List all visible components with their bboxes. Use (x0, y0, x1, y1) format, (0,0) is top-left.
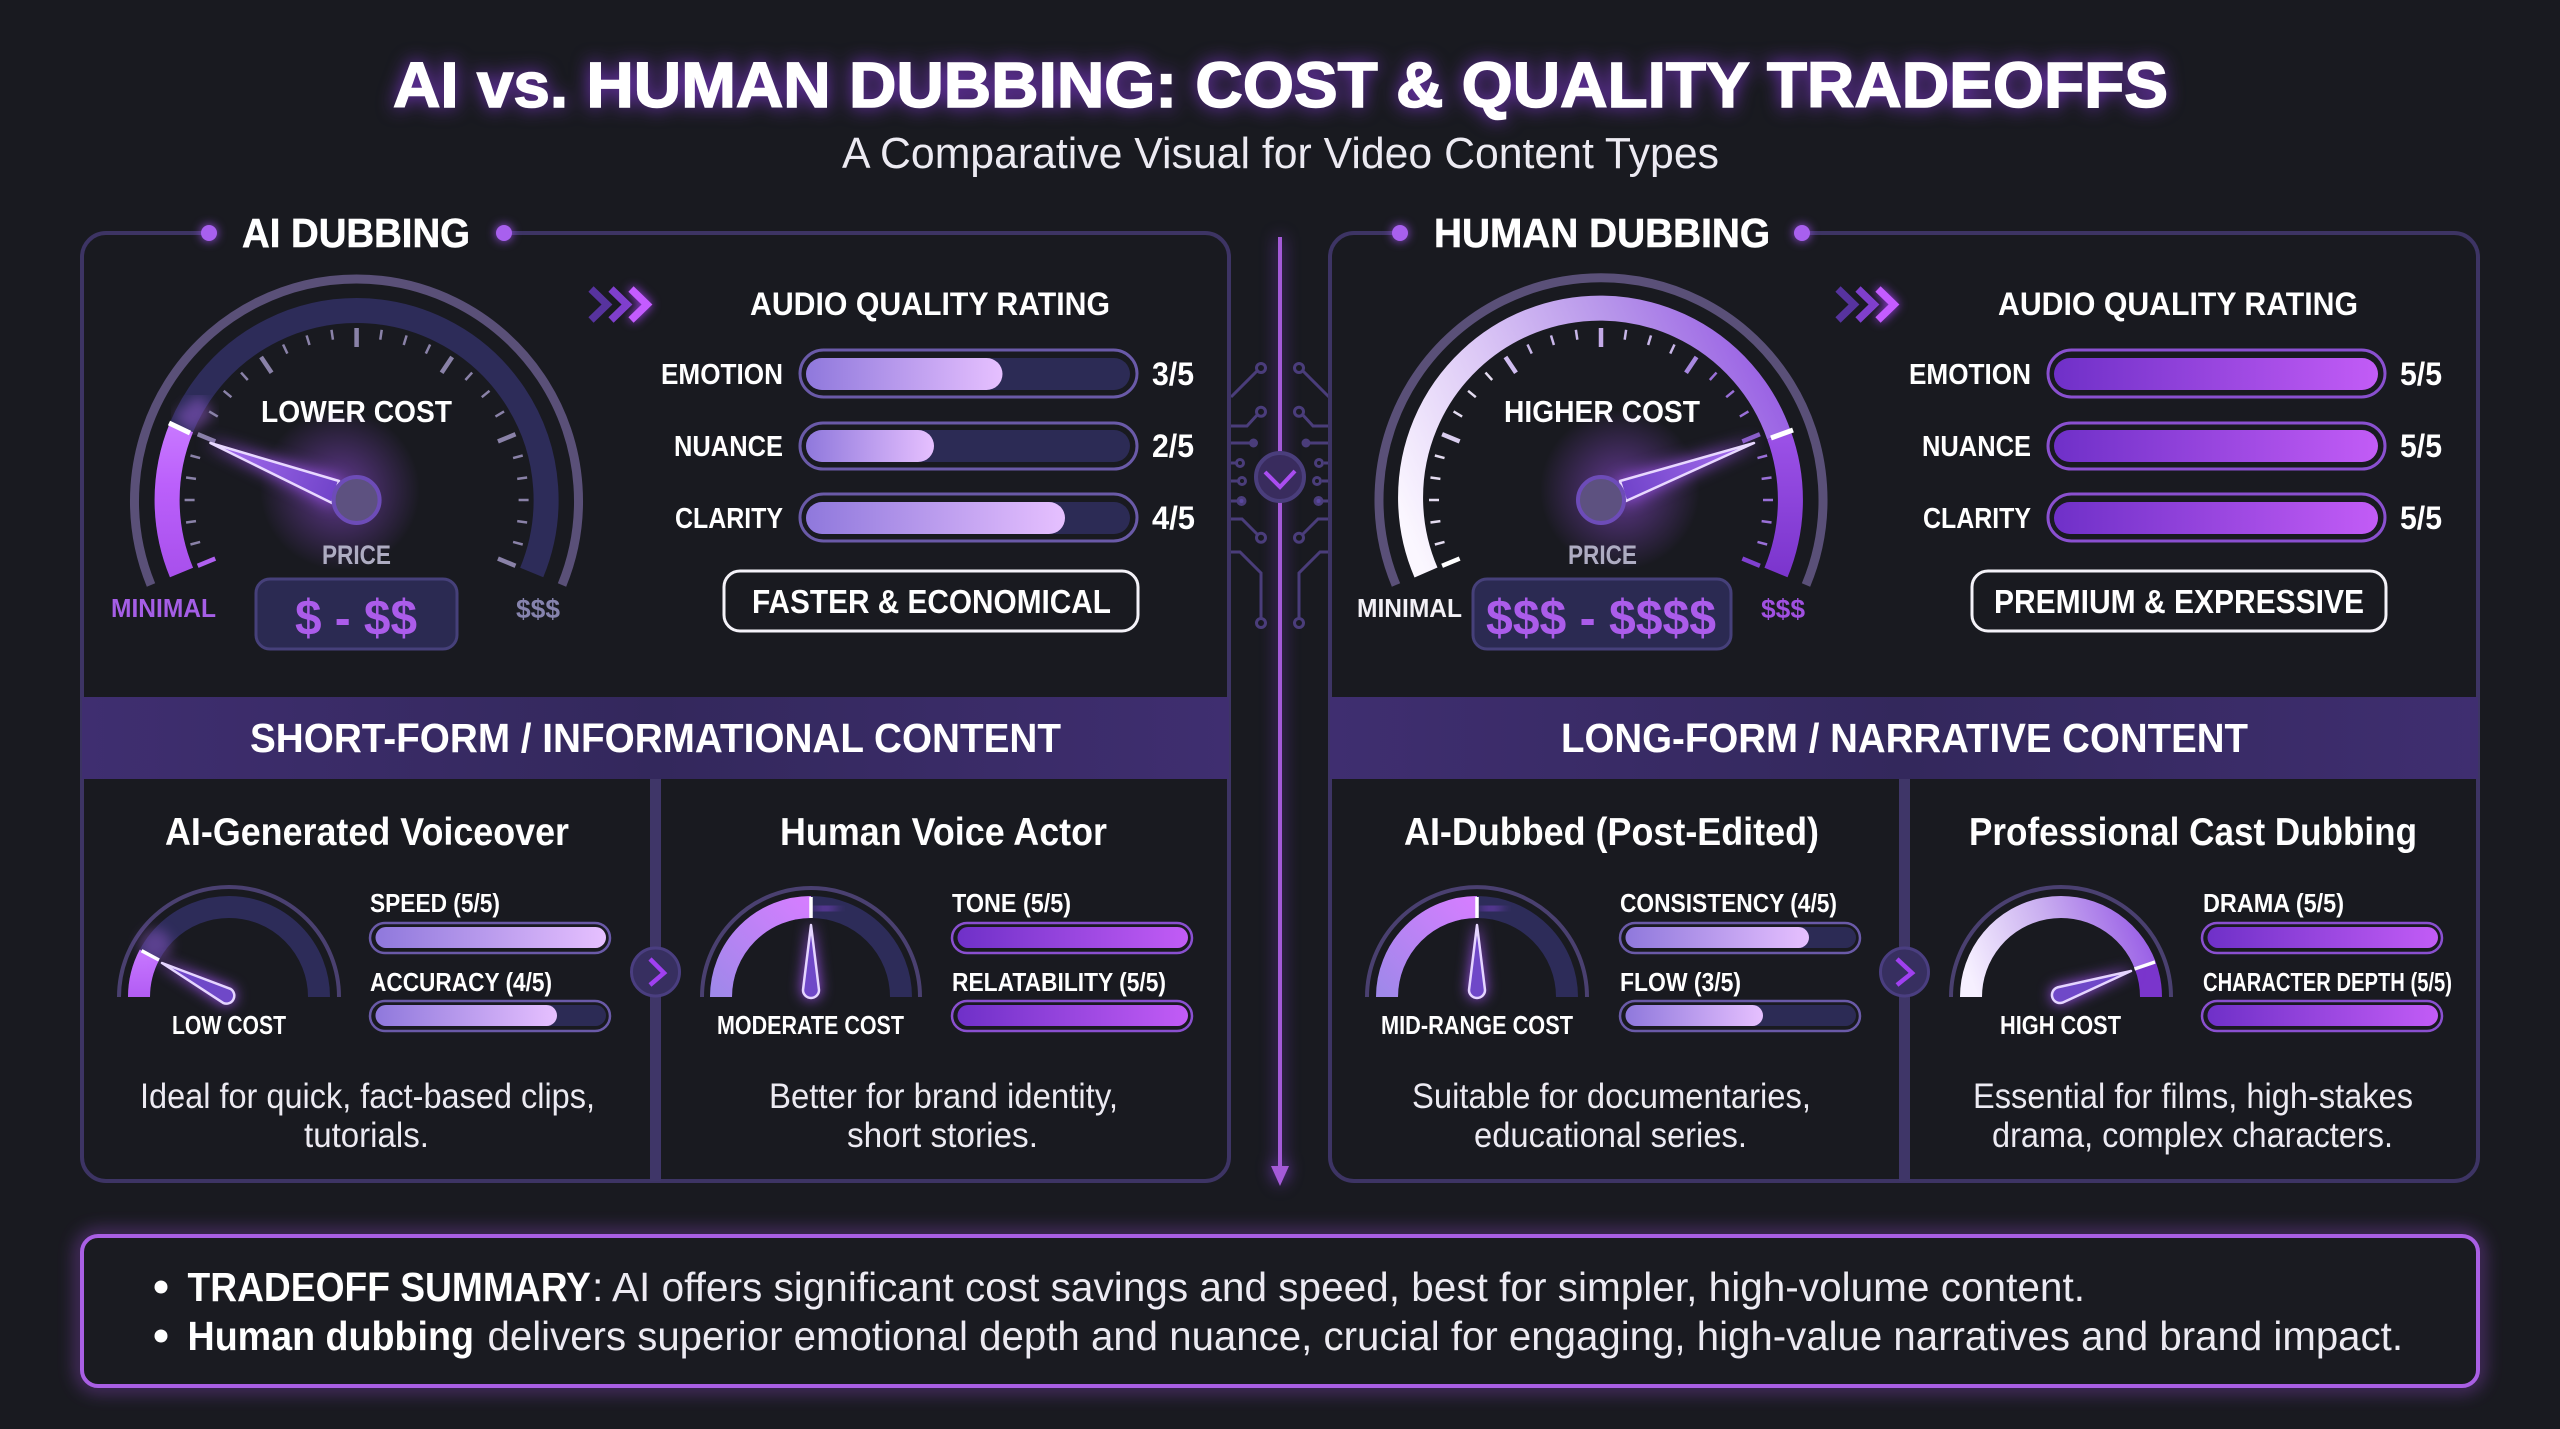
option: human voice actor: MODERATE COST (717, 1010, 904, 1040)
description (1973, 1077, 2413, 1155)
minimal label: MINIMAL (1357, 593, 1462, 623)
option: professional cast dubbing: HIGH COST (2000, 1010, 2121, 1040)
audio quality heading: AUDIO QUALITY RATING (750, 286, 1110, 322)
section band: LONG-FORM / NARRATIVE CONTENT (1561, 715, 2248, 761)
heading dots (201, 225, 512, 241)
panel: AI dubbing (82, 210, 1229, 1181)
panel frame (1330, 233, 2478, 1181)
metric: relatability (952, 967, 1192, 1031)
metric: accuracy (370, 967, 610, 1031)
option: AI-dubbed post-edited: AI-Dubbed (Post-Edited) (1404, 811, 1819, 854)
rating: emotion: EMOTION (1909, 359, 2031, 391)
description: tutorials. (304, 1116, 429, 1155)
rating: emotion: 5/5 (2400, 356, 2442, 392)
rating: clarity (675, 494, 1195, 541)
rating: emotion (1909, 350, 2442, 397)
rating: emotion: 3/5 (1152, 356, 1194, 392)
metric: tone: TONE (5/5) (952, 888, 1071, 918)
metric: character depth (2202, 967, 2452, 1031)
metric: accuracy: ACCURACY (4/5) (370, 967, 552, 997)
center divider with circuit traces (1231, 237, 1329, 1186)
description: Essential for films, high-stakes (1973, 1077, 2413, 1116)
description (769, 1077, 1118, 1155)
line 1: TRADEOFF SUMMARY (188, 1264, 591, 1310)
rating: nuance: NUANCE (1922, 431, 2031, 463)
rating: nuance: 5/5 (2400, 428, 2442, 464)
option: human voice actor (702, 811, 1192, 1155)
line 1: : (592, 1264, 603, 1310)
divider between options (1880, 779, 1928, 1181)
heading: AI DUBBING (242, 210, 470, 256)
line 2: delivers superior emotional depth and nuance, crucial for engaging, high-value narratives and brand impact. (488, 1313, 2403, 1359)
description (1412, 1077, 1811, 1155)
price gauge (111, 279, 578, 649)
max price label: $$$ (1761, 594, 1805, 624)
metric: consistency (1620, 888, 1860, 953)
price label: PRICE (1568, 540, 1637, 570)
metric: flow (1620, 967, 1860, 1031)
line 2: Human dubbing (188, 1313, 474, 1359)
metric: relatability: RELATABILITY (5/5) (952, 967, 1166, 997)
line 1: AI offers significant cost savings and speed, best for simpler, high-volume content. (612, 1264, 2085, 1310)
price box: $$$ - $$$$ (1486, 590, 1716, 646)
chevrons (1838, 289, 1894, 320)
description: Ideal for quick, fact-based clips, (140, 1077, 595, 1116)
description: drama, complex characters. (1992, 1116, 2393, 1155)
section band: SHORT-FORM / INFORMATIONAL CONTENT (250, 715, 1061, 761)
description: short stories. (847, 1116, 1038, 1155)
description (140, 1077, 595, 1155)
price box: $ - $$ (295, 590, 417, 646)
minimal label: MINIMAL (111, 593, 216, 623)
rating: clarity: CLARITY (675, 503, 783, 535)
mini gauge (119, 887, 339, 1004)
rating: nuance: NUANCE (674, 431, 783, 463)
option: AI-dubbed post-edited: MID-RANGE COST (1381, 1010, 1573, 1040)
metric: consistency: CONSISTENCY (4/5) (1620, 888, 1837, 918)
needle (1540, 410, 1754, 570)
title: AI vs. HUMAN DUBBING: COST & QUALITY TRADEOFFS (393, 49, 2168, 121)
circuit traces right (1294, 364, 1329, 628)
gauge label: LOWER COST (261, 394, 452, 429)
ticks (1429, 328, 1773, 566)
section band (82, 697, 1229, 779)
max price label: $$$ (516, 594, 560, 624)
rating: emotion: EMOTION (661, 359, 783, 391)
subtitle: A Comparative Visual for Video Content Types (842, 129, 1719, 178)
metric: speed: SPEED (5/5) (370, 888, 500, 918)
price gauge (1357, 278, 1823, 649)
divider between options (632, 779, 680, 1181)
rating: clarity: CLARITY (1923, 503, 2031, 535)
heading dots (1392, 225, 1810, 241)
price label: PRICE (322, 540, 391, 570)
option: AI-generated voiceover (119, 811, 610, 1155)
mini gauge (1951, 887, 2171, 1003)
vertical arrow line (1271, 237, 1289, 1186)
description: Suitable for documentaries, (1412, 1077, 1811, 1116)
option: human voice actor: Human Voice Actor (780, 811, 1107, 854)
circuit traces left (1231, 364, 1266, 628)
option: professional cast dubbing: Professional Cast Dubbing (1969, 811, 2417, 854)
price box (256, 579, 457, 649)
audio quality heading: AUDIO QUALITY RATING (1998, 286, 2358, 322)
metric: speed (370, 888, 610, 953)
section band (1330, 697, 2478, 779)
ticks (185, 328, 529, 566)
metric: character depth: CHARACTER DEPTH (5/5) (2203, 967, 2452, 997)
description: educational series. (1474, 1116, 1747, 1155)
mini gauge (1367, 887, 1587, 998)
metric: drama (2202, 888, 2442, 953)
panel frame (82, 233, 1229, 1181)
rating: nuance: 2/5 (1152, 428, 1194, 464)
rating: nuance (674, 423, 1194, 469)
badge: PREMIUM & EXPRESSIVE (1994, 583, 2364, 620)
badge (724, 571, 1138, 631)
rating: nuance (1922, 423, 2442, 469)
metric: drama: DRAMA (5/5) (2203, 888, 2344, 918)
panel: human dubbing (1330, 210, 2478, 1181)
gauge label: HIGHER COST (1504, 394, 1700, 429)
center chevron badge (1256, 453, 1304, 501)
option: professional cast dubbing (1951, 811, 2452, 1155)
rating: clarity (1923, 494, 2442, 541)
badge (1972, 571, 2386, 631)
metric: tone (952, 888, 1192, 953)
summary box (82, 1236, 2478, 1386)
option: AI-generated voiceover: AI-Generated Voiceover (165, 811, 569, 854)
rating: emotion (661, 350, 1194, 397)
description: Better for brand identity, (769, 1077, 1118, 1116)
option: AI-dubbed post-edited (1367, 811, 1860, 1155)
mini gauge (702, 888, 920, 998)
chevrons (591, 289, 647, 320)
option: AI-generated voiceover: LOW COST (172, 1010, 286, 1040)
heading: HUMAN DUBBING (1434, 210, 1770, 256)
rating: clarity: 5/5 (2400, 500, 2442, 536)
needle (210, 410, 420, 570)
metric: flow: FLOW (3/5) (1620, 967, 1741, 997)
rating: clarity: 4/5 (1152, 500, 1195, 536)
badge: FASTER & ECONOMICAL (752, 583, 1111, 620)
